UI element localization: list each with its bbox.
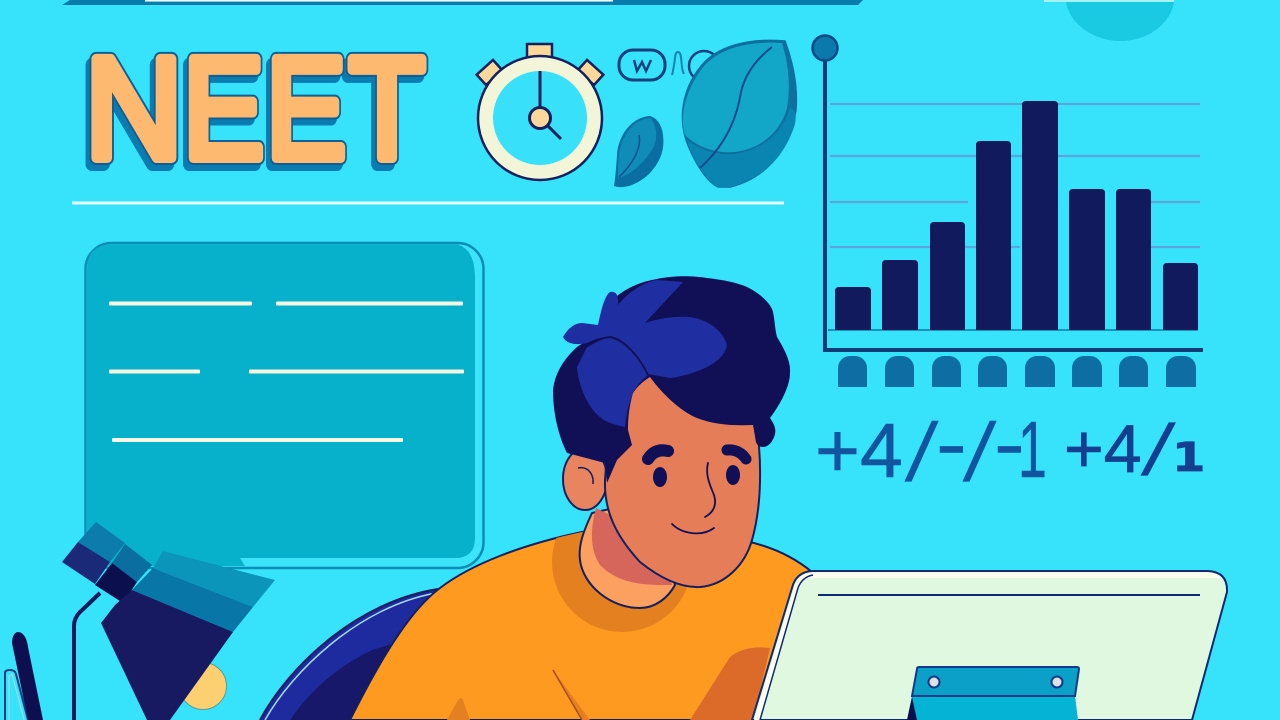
- panel text lines: [109, 302, 464, 442]
- marking scheme text: +4/1: 1: [1172, 435, 1205, 481]
- top banner bar: [62, 0, 863, 5]
- title: NEET: T: [349, 28, 425, 189]
- marking scheme text: +4/-/-1: /: [902, 406, 941, 498]
- shirt: [349, 531, 812, 720]
- chart baseline: [828, 329, 1198, 331]
- hair: [553, 276, 790, 483]
- marking scheme text: +4/-/-1: -: [994, 401, 1025, 487]
- facial features: [648, 450, 746, 533]
- lamp arm: [74, 593, 100, 720]
- title: NEET: [85, 27, 425, 189]
- lamp back segment: [62, 522, 152, 603]
- icon: stopwatch: [477, 44, 603, 180]
- ear: [563, 448, 607, 510]
- monitor stand: [907, 667, 1079, 720]
- icon: large leaf: [682, 40, 796, 187]
- chart axis knob: [812, 36, 838, 60]
- computer monitor: [752, 571, 1227, 720]
- chart grid lines: [830, 104, 1200, 247]
- title: NEET: N: [85, 27, 183, 189]
- neck: [580, 500, 675, 608]
- pen holder: pen and clip: [5, 632, 43, 720]
- divider under title: [72, 202, 784, 204]
- icon: small leaf: [614, 116, 663, 187]
- title: NEET: T: [349, 28, 425, 189]
- marking scheme text: +4/1: +4: [1064, 411, 1142, 487]
- marking scheme text: +4/-/-1: [815, 401, 1047, 498]
- marking scheme text: +4/1: [1064, 411, 1205, 490]
- lamp bulb: [180, 662, 226, 710]
- monitor top line: [818, 594, 1200, 596]
- face: [605, 350, 760, 587]
- chart axes: [825, 58, 1203, 350]
- chair back: [260, 589, 438, 720]
- desk lamp: [62, 522, 275, 720]
- hair highlight: front lock: [563, 280, 727, 378]
- student figure: [350, 276, 812, 720]
- title: NEET: E: [183, 28, 264, 189]
- monitor highlights: [754, 572, 1221, 720]
- title: NEET: E: [266, 29, 346, 189]
- marking scheme text: +4/1: /: [1138, 412, 1178, 490]
- marking scheme text: +4/-/-1: +4: [815, 408, 903, 494]
- marking scheme text: +4/-/-1: /: [960, 406, 999, 498]
- chart category tabs: [838, 356, 1196, 387]
- chart: bar chart: [812, 36, 1203, 350]
- title: NEET: E: [266, 29, 346, 189]
- hair highlight: side: [577, 338, 648, 427]
- title: NEET: N: [85, 27, 183, 189]
- top right semicircle: [1044, 0, 1174, 41]
- icon: small symbols: [619, 50, 719, 81]
- chart bars: [835, 101, 1198, 330]
- panel: notes card: [86, 243, 484, 568]
- title: NEET: E: [183, 28, 264, 189]
- marking scheme text: +4/-/-1: -: [936, 401, 967, 487]
- lamp shade: [101, 551, 275, 720]
- marking scheme text: +4/-/-1: 1: [1018, 406, 1047, 495]
